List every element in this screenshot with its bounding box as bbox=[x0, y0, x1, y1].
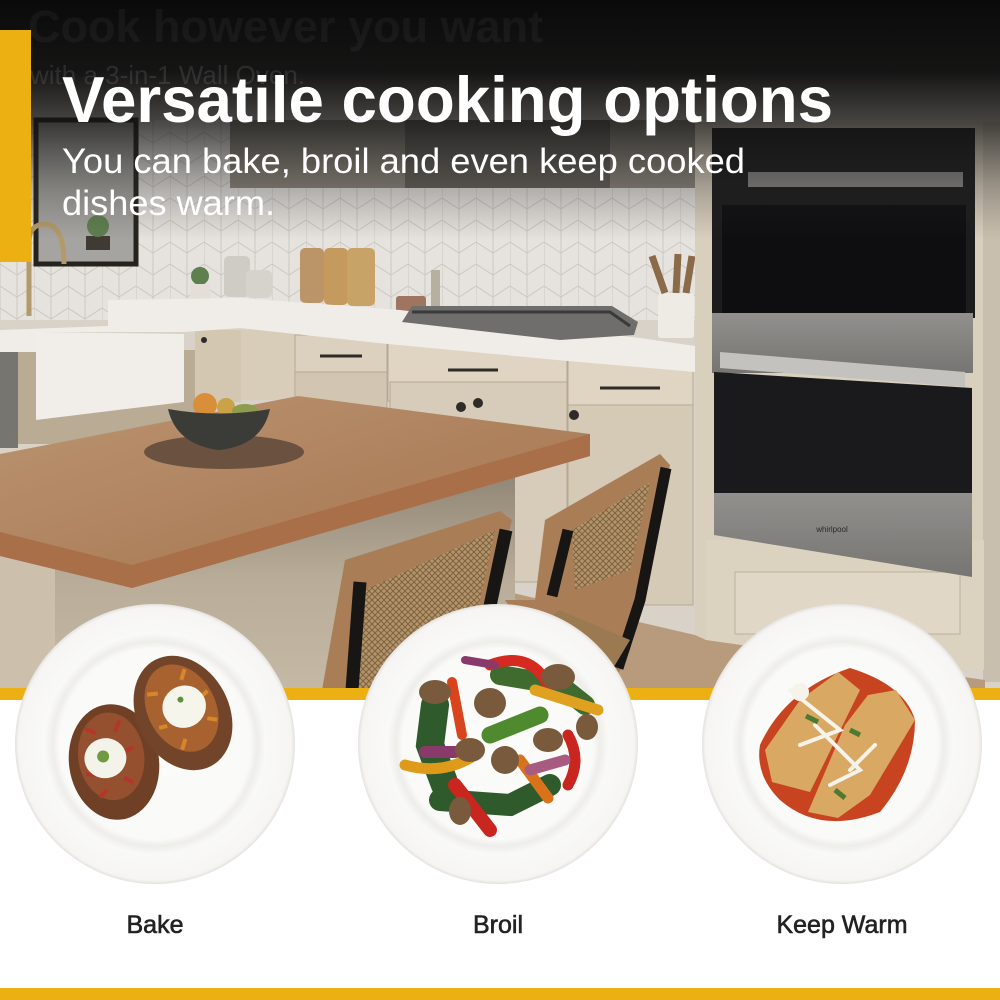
cooktop bbox=[402, 306, 638, 340]
yellow accent block bbox=[0, 30, 31, 262]
label: Keep Warm: Keep Warm bbox=[776, 911, 908, 939]
dark top gradient overlay bbox=[0, 0, 1000, 240]
chairs bbox=[322, 511, 512, 690]
potato left bbox=[61, 698, 167, 826]
subtitle: dishes warm. bbox=[62, 184, 275, 223]
yellow band behind plates bbox=[0, 688, 1000, 700]
plate: broiled vegetables bbox=[358, 604, 638, 884]
floor bbox=[500, 590, 985, 690]
jars bbox=[300, 248, 324, 303]
subtitle bbox=[62, 142, 745, 223]
faint background headline bbox=[28, 1, 543, 90]
plate: baked potatoes bbox=[15, 604, 295, 884]
lower cabinet below oven bbox=[706, 540, 984, 670]
potato right bbox=[114, 638, 252, 788]
white lower panel bbox=[0, 688, 1000, 1000]
bottom yellow rule bbox=[0, 988, 1000, 1000]
upper cabinets and hood bbox=[230, 120, 700, 188]
kitchen background photo: whirlpool bbox=[815, 525, 848, 534]
fruit bowl bbox=[168, 393, 270, 450]
kitchen background photo bbox=[0, 0, 1000, 690]
faint background headline: with a 3-in-1 Wall Oven. bbox=[29, 60, 305, 90]
tile backsplash bbox=[0, 120, 710, 320]
label: Broil: Broil bbox=[473, 911, 523, 939]
faint background headline: Cook however you want bbox=[28, 1, 543, 52]
label: Bake: Bake bbox=[127, 911, 183, 939]
placemat bbox=[144, 435, 304, 469]
island bbox=[55, 470, 515, 690]
title: Versatile cooking options bbox=[62, 64, 833, 136]
farmhouse sink bbox=[36, 332, 184, 420]
base cabinets bbox=[0, 352, 18, 448]
subtitle: You can bake, broil and even keep cooked bbox=[62, 142, 745, 181]
plate: enchiladas bbox=[702, 604, 982, 884]
countertop bbox=[0, 298, 695, 372]
oven cabinet column bbox=[695, 122, 1000, 652]
window bbox=[36, 120, 136, 264]
faucet bbox=[29, 224, 64, 316]
cabinet handles bbox=[320, 356, 660, 388]
double wall oven bbox=[712, 128, 975, 318]
utensil crock bbox=[658, 293, 694, 338]
